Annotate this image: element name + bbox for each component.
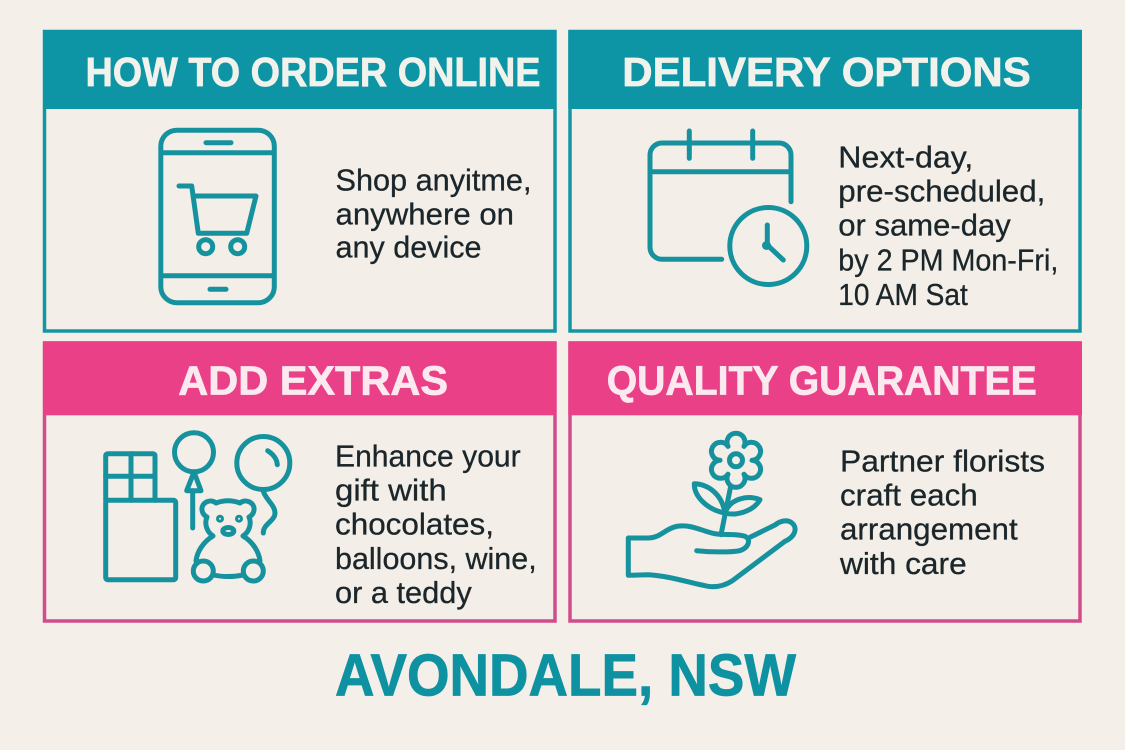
text: quality description: Partner florists [840,443,1045,478]
heading bar: quality guarantee: QUALITY GUARANTEE [607,358,1037,404]
text: how to order description: any device [336,230,482,265]
text: extras description: Enhance your [335,438,521,473]
text: extras description: gift with [335,472,447,507]
text: extras description: chocolates, [335,507,494,542]
heading bar: add extras: ADD EXTRAS [178,358,448,404]
text: quality description [839,443,1045,581]
text: extras description [335,438,537,610]
text: how to order description: Shop anyitme, [336,163,532,198]
icon: phone with shopping cart [161,130,274,303]
panel: delivery options [568,30,1082,331]
text: delivery description: 10 AM Sat [838,277,968,312]
text: delivery description [838,140,1058,312]
icon: teddy bear [193,501,263,581]
panel: quality guarantee [568,341,1082,621]
heading bar: how to order online: HOW TO ORDER ONLINE [86,49,540,95]
panel: add extras [43,341,556,621]
text: delivery description: by 2 PM Mon-Fri, [838,242,1058,278]
text: delivery description: Next-day, [838,140,973,175]
icon: chocolate, balloons and teddy [106,433,290,581]
heading bar: quality guarantee [568,341,1082,415]
text: delivery description: pre-scheduled, [838,174,1045,209]
icon: calendar with clock [650,131,807,284]
text: extras description: or a teddy [335,575,472,610]
icon: large balloon [237,436,290,533]
text: extras description: balloons, wine, [335,541,537,576]
text: delivery description: or same-day [838,208,1011,243]
text: quality description: with care [839,546,967,581]
heading bar: delivery options [568,30,1082,109]
icon: small balloon [174,433,214,528]
text: how to order description: anywhere on [336,196,514,232]
icon: chocolate bar [106,454,176,580]
footer title: location: AVONDALE, NSW [335,643,796,709]
text: quality description: craft each [840,477,978,512]
heading bar: add extras [43,341,556,415]
panel: how to order online [43,30,556,331]
text: quality description: arrangement [840,512,1018,547]
heading bar: delivery options: DELIVERY OPTIONS [622,49,1031,95]
heading bar: how to order online [43,30,556,109]
icon: hand holding flower [628,433,795,587]
text: how to order description [336,163,532,265]
